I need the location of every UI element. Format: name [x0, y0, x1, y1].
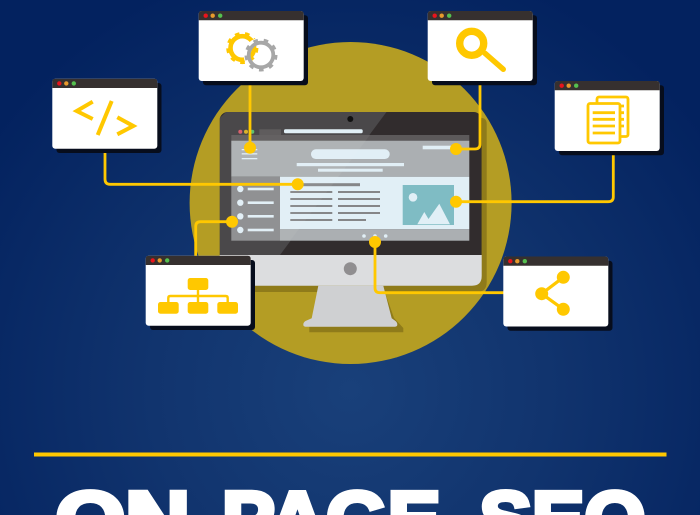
connector dots [226, 142, 462, 248]
browser tab [259, 129, 281, 135]
address bar [284, 129, 363, 133]
page content area [280, 177, 469, 229]
connector: code [105, 147, 298, 184]
grey gear [246, 40, 276, 70]
window shadow [508, 261, 612, 331]
monitor chin [220, 255, 482, 286]
header text lines [297, 146, 453, 172]
monitor stand [303, 286, 397, 327]
window shadow [432, 15, 537, 85]
monitor bezel [220, 112, 482, 255]
window shadow [150, 260, 255, 330]
icon: magnifier [460, 31, 503, 69]
icon: documents [588, 97, 628, 143]
window body [428, 11, 533, 81]
monitor logo [344, 262, 357, 275]
window buttons [508, 259, 527, 263]
window body [52, 79, 157, 149]
window title bar [503, 256, 608, 266]
window title bar [146, 256, 251, 265]
sidebar menu [237, 186, 274, 233]
window buttons [204, 14, 222, 18]
window title bar [199, 11, 304, 20]
gold circle [190, 42, 512, 364]
icon: gears [228, 33, 276, 70]
window body [199, 11, 304, 81]
slider dots [362, 234, 388, 238]
window buttons [57, 81, 76, 86]
icon: code brackets [77, 101, 133, 135]
window title bar [52, 79, 157, 88]
page sidebar [231, 177, 280, 241]
browser dots [238, 130, 254, 134]
icon: sitemap [158, 278, 238, 314]
connector lines [105, 80, 613, 293]
window body [503, 256, 608, 326]
window body [555, 81, 660, 151]
window: code [52, 79, 161, 153]
connector: documents [456, 150, 613, 202]
connector: gears [249, 80, 251, 148]
browser on screen [231, 129, 469, 241]
image placeholder [403, 185, 454, 225]
window shadow [203, 15, 308, 85]
window body [146, 256, 251, 326]
window title bar [428, 11, 533, 20]
page footer [280, 229, 469, 241]
window: search [428, 11, 537, 85]
hamburger menu [242, 149, 257, 159]
window buttons [432, 14, 451, 18]
header search pill [311, 149, 390, 159]
connector: search [456, 80, 480, 149]
window: share [503, 256, 612, 331]
window: sitemap [146, 256, 255, 330]
connector: share [375, 242, 504, 293]
icon: share [535, 271, 570, 316]
window shadow [559, 85, 664, 155]
browser toolbar [231, 135, 469, 141]
window title bar [555, 81, 660, 90]
monitor camera [347, 116, 353, 122]
page header [231, 141, 469, 177]
monitor [220, 112, 487, 332]
window: gears [199, 11, 308, 85]
divider line [34, 452, 666, 456]
yellow gear [228, 33, 257, 63]
connector: sitemap [196, 222, 232, 256]
window buttons [150, 258, 169, 263]
window shadow [56, 83, 162, 153]
content text lines [290, 183, 380, 221]
window buttons [560, 84, 578, 88]
monitor shadow [230, 118, 487, 332]
window: documents [555, 81, 664, 155]
screen glare [231, 135, 370, 241]
